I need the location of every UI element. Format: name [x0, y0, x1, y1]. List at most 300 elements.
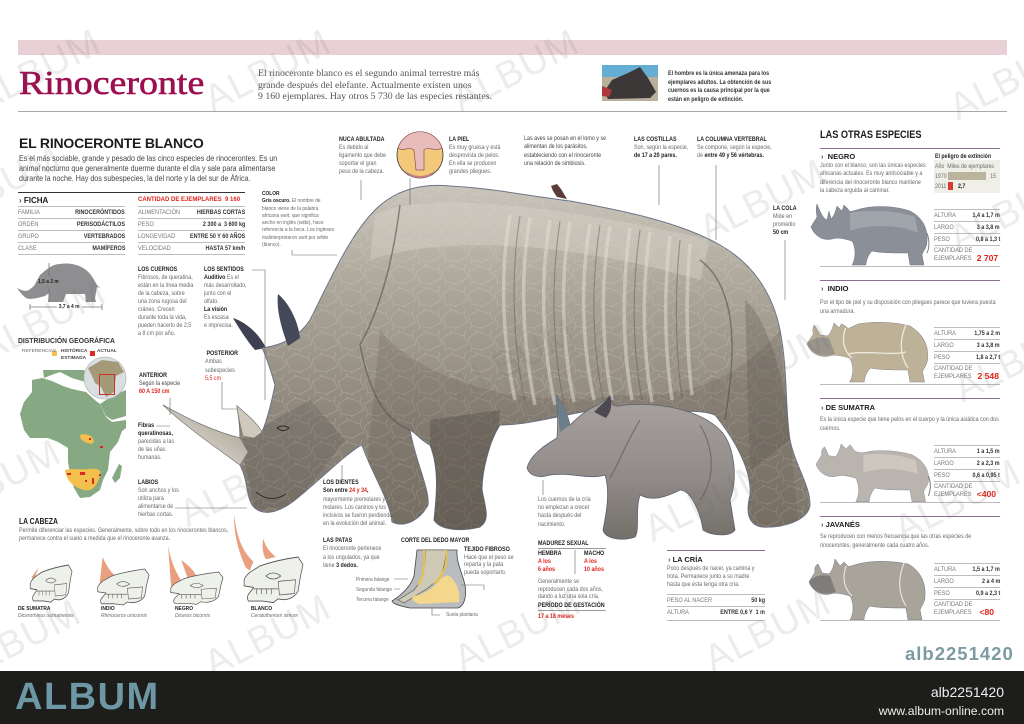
intro text: 9 160 ejemplares. Hay otros 5 730 de las especies restantes.	[258, 91, 492, 102]
indio text: una armadura.	[820, 308, 855, 315]
callout: calf horns: no empiezan a crecer	[538, 504, 589, 511]
callout: posterior horn: subespecies	[205, 367, 235, 374]
illustration: sumatran rhino	[816, 444, 930, 502]
photo caption: ejemplares adultos. La obtención de sus	[668, 78, 771, 86]
watermarks: ALBUM	[173, 436, 313, 536]
callout: senses: olfato.	[204, 298, 219, 305]
indio table: ALTURA	[934, 330, 956, 337]
callout: keratin fibres: queratinosas,	[138, 430, 173, 437]
indio table: LARGO	[934, 342, 954, 349]
panel: sumatra	[820, 398, 1000, 503]
callout: neck	[339, 136, 386, 175]
reproduction text: dando a luz una sola cría.	[538, 593, 599, 600]
sumatra table: <400	[977, 489, 996, 499]
callout: tail: 50 cm	[773, 229, 788, 236]
callout: posterior horn: POSTERIOR	[206, 350, 238, 357]
negro heading: › NEGRO	[821, 152, 855, 161]
header rule	[18, 111, 1007, 112]
sumatra table: ALTURA	[934, 448, 956, 455]
callout: color: malinterpretaron weit por white	[262, 235, 328, 241]
callout: neck: Es debido al	[339, 144, 368, 151]
callout: horns: LOS CUERNOS	[138, 266, 177, 273]
skull: Indio	[98, 557, 149, 605]
callout: fibrous tissue	[464, 546, 514, 576]
callout: teeth: LOS DIENTES	[323, 479, 359, 486]
callout: skin: grandes pliegues.	[449, 168, 491, 175]
second horn	[237, 406, 262, 438]
gestation: PERÍODO DE GESTACIÓN	[538, 602, 605, 609]
callout: teeth: molares. Los caninos y los	[323, 504, 386, 511]
callout: neck: NUCA ABULTADA	[339, 136, 384, 143]
skull label: Negro: NEGRO	[175, 606, 193, 612]
inset: skin section	[397, 132, 443, 178]
shading	[240, 400, 345, 510]
callout: neck: soportar el gran	[339, 160, 376, 167]
extinction chart	[934, 160, 1000, 193]
callout: horns	[138, 266, 194, 337]
callout: anterior horn: ANTERIOR	[139, 372, 167, 379]
sumatra table: LARGO	[934, 460, 954, 467]
toe labels: Segunda falange	[356, 587, 392, 593]
ficha data table: ENTRE 50 Y 60 AÑOS	[190, 233, 245, 240]
callout: feet: El rinoceronte pertenece	[323, 545, 381, 552]
callout: calf horns: nacimiento.	[538, 521, 565, 528]
callout: color: africana weit, que significa	[262, 213, 319, 219]
callout: ribs: LAS COSTILLAS	[634, 136, 677, 143]
indio table: 1,75 a 2 m	[974, 330, 1000, 337]
heading: other species: LAS OTRAS ESPECIES	[820, 129, 921, 141]
callout: feet: LAS PATAS	[323, 537, 352, 544]
photo caption: cuernos es la causa principal por la que	[668, 87, 770, 94]
watermarks: ALBUM	[198, 21, 338, 121]
callout: tail	[773, 205, 797, 236]
panel: the calf	[667, 550, 765, 621]
callout: fibrous tissue: Hace que el peso se	[464, 554, 514, 561]
skull label: Blanco: Ceratotherium simum	[251, 612, 298, 618]
callout: senses	[204, 266, 247, 329]
ficha data table: ALIMENTACIÓN	[138, 209, 180, 216]
javanes table: CANTIDAD DE	[934, 601, 972, 608]
javanes table: 1,5 a 1,7 m	[973, 566, 1000, 573]
extinction chart labels	[935, 153, 996, 190]
negro table: EJEMPLARES	[934, 255, 971, 262]
female maturity	[538, 550, 562, 573]
callout: senses: La visión	[204, 306, 227, 313]
calf text: hasta que ésta tenga otra cría.	[667, 581, 740, 588]
reproduction text	[538, 578, 603, 600]
skull: Sumatra	[30, 565, 72, 602]
calf text	[667, 565, 754, 588]
indio heading: › INDIO	[821, 284, 849, 293]
photo: hunted rhino	[602, 65, 658, 101]
calf text: Poco después de nacer, ya camina y	[667, 565, 754, 572]
skull label: Indio: INDIO	[101, 606, 115, 612]
front horn	[163, 405, 248, 465]
white rhino description: durante la noche. Hay dos subespecies, la del norte y la del sur de África.	[19, 173, 250, 183]
ficha taxonomy table: GRUPO	[18, 233, 39, 240]
inset: toe section	[392, 550, 466, 608]
negro table: CANTIDAD DE	[934, 247, 972, 254]
callout: lips: LABIOS	[138, 479, 158, 486]
ficha taxonomy table: VERTEBRADOS	[83, 233, 125, 240]
intro text: El rinoceronte blanco es el segundo animal terrestre más	[258, 68, 479, 79]
javanes table: EJEMPLARES	[934, 609, 971, 616]
ficha taxonomy table: MAMÍFEROS	[92, 245, 125, 252]
callout: horns: durante toda la vida,	[138, 314, 187, 321]
skull label: Sumatra: DE SUMATRA	[18, 606, 50, 612]
callout: teeth: en la evolución del animal.	[323, 520, 386, 527]
ribs	[504, 215, 692, 405]
indio table: PESO	[934, 354, 950, 361]
panel: ficha	[18, 192, 245, 255]
javanes table: 2 a 4 m	[982, 578, 1000, 585]
callout: color: Gris oscuro. El nombre de	[262, 198, 321, 204]
indio table: 1,8 a 2,7 t	[976, 354, 1000, 361]
ficha heading: › FICHA	[19, 196, 48, 205]
callout: keratin fibres	[138, 422, 174, 461]
javanes text: Se reproducen con menos frecuencia que las otras especies de	[820, 533, 971, 540]
photo caption: El hombre es la única amenaza para los	[668, 70, 769, 77]
ficha data table: 2 300 a 3 600 kg	[203, 221, 245, 228]
callout: spine: de entre 49 y 56 vértebras.	[697, 152, 764, 159]
callout: horns: una zona rugosa del	[138, 298, 187, 305]
negro text: africanas actuales. Es muy antisociable y a	[820, 170, 922, 177]
silhouette measure: length: 3,7 a 4 m	[59, 304, 80, 310]
maturity heading	[538, 540, 606, 549]
heading: distribution: DISTRIBUCIÓN GEOGRÁFICA	[18, 336, 115, 345]
callout: senses: Auditivo Es el	[204, 274, 239, 281]
sumatra table	[934, 445, 1000, 501]
sumatra table: 1 a 1,5 m	[977, 448, 1000, 455]
toe labels	[356, 577, 392, 603]
callout: horns: Fibrosos, de queratina,	[138, 274, 193, 281]
callout: teeth: incisivos se fueron perdiendo	[323, 512, 392, 519]
callout: posterior horn: Ambas	[205, 358, 222, 365]
watermarks: ALBUM	[693, 151, 833, 251]
callout: horns: a 8 cm por año.	[138, 330, 175, 337]
indio table: EJEMPLARES	[934, 373, 971, 380]
callout: skin: En ella se producen	[449, 160, 496, 167]
callout: tail: promedio	[773, 221, 795, 228]
callout: color: COLOR	[262, 191, 279, 197]
callout: anterior horn: 60 A 150 cm	[139, 388, 170, 395]
watermarks: ALBUM	[446, 21, 586, 121]
skull label: Blanco: BLANCO	[251, 606, 272, 612]
white rhino description: animal nocturno que generalmente duerme durante el día y sale para alimentarse	[19, 163, 275, 173]
photo caption	[668, 70, 771, 102]
heading: the head: LA CABEZA	[19, 517, 58, 526]
javanes table: LARGO	[934, 578, 954, 585]
sumatra text: Es la única especie que tiene pelos en el cuerpo y la única asiática con dos	[820, 416, 999, 423]
javanes table: ALTURA	[934, 566, 956, 573]
map legend: REFERENCIAS	[22, 349, 56, 354]
negro table: LARGO	[934, 224, 954, 231]
negro table	[934, 209, 1000, 265]
watermarks: ALBUM	[888, 451, 1024, 551]
callout: posterior horn: 5,5 cm	[205, 375, 221, 382]
icon: ficha rhino silhouette with dimensions	[17, 263, 102, 310]
silhouette measure: length	[57, 303, 81, 311]
negro text: Junto con el blanco, son las únicas especies	[820, 162, 926, 169]
callout: birds: una relación de simbiosis.	[524, 160, 586, 167]
map legend	[22, 348, 117, 361]
illustration: bird on back	[551, 184, 567, 199]
callout: skin	[449, 136, 500, 175]
callout: posterior horn	[205, 350, 238, 382]
skull: Blanco	[234, 514, 303, 603]
callout: senses: e imprecisa.	[204, 322, 233, 329]
skull label: Negro: Diceros bicornis	[175, 612, 210, 618]
callout: feet	[323, 537, 382, 569]
head description	[19, 527, 228, 542]
illustration: javan rhino	[809, 559, 925, 620]
javanes text	[820, 532, 971, 550]
head description: permanece contra el suelo a medida que el rinoceronte avanza.	[19, 535, 170, 542]
negro text: diferencia del rinoceronte blanco mantiene	[820, 179, 921, 186]
reproduction text: Generalmente se	[538, 578, 579, 585]
bottom bar	[0, 671, 1024, 724]
map legend: ACTUAL	[97, 349, 117, 354]
white rhino description: Es el más sociable, grande y pesado de las cinco especies de rinocerontes. Es un	[19, 153, 277, 163]
panel: javanes	[820, 516, 1000, 621]
sumatra table: CANTIDAD DE	[934, 483, 972, 490]
ficha data table	[138, 206, 245, 255]
negro text: la cabeza erguida al caminar.	[820, 187, 890, 194]
extinction chart labels: 15	[990, 173, 996, 180]
callout: lips: alimentarse de	[138, 503, 173, 510]
skull label: Indio: Rhinoceros unicornis	[101, 612, 147, 618]
extinction chart labels: 2,7	[958, 183, 965, 190]
heading: toe section: CORTE DEL DEDO MAYOR	[401, 537, 469, 544]
negro table: PESO	[934, 236, 950, 243]
javanes text: rinocerontes, generalmente cada cuatro años.	[820, 542, 929, 549]
gestation value: 17 a 18 meses	[538, 613, 574, 620]
map legend: ESTIMADA	[61, 356, 86, 361]
callout: lips: Son anchos y los	[138, 487, 179, 494]
callout: color: (blanco).	[262, 242, 281, 248]
female maturity: 6 años	[538, 566, 555, 573]
title: Rinoceronte	[19, 65, 204, 102]
male maturity: 10 años	[584, 566, 604, 573]
negro table: 1,4 a 1,7 m	[973, 212, 1000, 219]
calf heading: › LA CRÍA	[668, 555, 703, 564]
callout: senses: Es escasa	[204, 314, 229, 321]
map legend: HISTÓRICA	[61, 349, 87, 354]
indio text: Por el tipo de piel y su disposición con pliegues parece que tuviera puesta	[820, 299, 996, 306]
map: geographic distribution of Africa	[20, 357, 126, 498]
callout: spine: Se compone, según la especie,	[697, 144, 772, 151]
callout: spine	[697, 136, 772, 159]
callout: birds	[524, 135, 606, 167]
callout: neck: peso de la cabeza.	[339, 168, 384, 175]
callout: horns: están en la línea media	[138, 282, 193, 289]
footer id: alb2251420	[931, 684, 1004, 700]
callout: teeth: mayormente premolares y	[323, 496, 385, 503]
extinction chart labels: 1970	[935, 173, 947, 180]
callout: ribs: Son, según la especie,	[634, 144, 688, 151]
callout: calf horns: hasta después del	[538, 512, 581, 519]
callout: color	[262, 191, 334, 248]
illustration: black rhino	[811, 204, 929, 265]
intro text	[258, 68, 492, 102]
sumatra text: cuernos.	[820, 425, 841, 432]
ficha data table: PESO	[138, 221, 154, 228]
callout: tail: LA COLA	[773, 205, 797, 212]
extinction chart labels: El peligro de extinción	[935, 153, 991, 160]
skull label: Blanco	[251, 606, 298, 618]
callout: fibrous tissue: pueda soportarlo.	[464, 569, 506, 576]
callout: lips	[138, 479, 179, 518]
photo caption: están en peligro de extinción.	[668, 96, 743, 102]
calf table	[667, 594, 765, 616]
javanes table: PESO	[934, 590, 950, 597]
callout: teeth: Son entre 24 y 34,	[323, 487, 369, 494]
head description: Permite diferenciar las especies. Generalmente, sobre todo en los rinocerontes blancos,	[19, 527, 228, 534]
callout: calf horns	[538, 496, 591, 528]
ficha data table: LONGEVIDAD	[138, 233, 175, 240]
footer id: www.album-online.com	[879, 704, 1004, 718]
ficha taxonomy table: PERISODÁCTILOS	[77, 221, 125, 228]
callout: horns: de la cabeza, sobre	[138, 290, 185, 297]
ficha data table: VELOCIDAD	[138, 245, 171, 252]
sumatra table: EJEMPLARES	[934, 491, 971, 498]
callout: horns: pueden hacerlo de 2,5	[138, 322, 191, 329]
skull label: Sumatra: Dicerorhinus sumatrensis	[18, 612, 74, 618]
extinction chart labels: 2011	[935, 183, 946, 190]
callout: keratin fibres: de las uñas	[138, 446, 165, 453]
calf table: ENTRE 0,6 Y 1 m	[720, 609, 765, 616]
callout: lips: hierbas cortas.	[138, 511, 173, 518]
callout: skin: desprovista de pelos.	[449, 152, 500, 159]
eye and mouth	[256, 426, 289, 499]
javanes table	[934, 563, 1000, 619]
sumatra table: 2 a 2,3 m	[977, 460, 1000, 467]
panel: indio	[820, 280, 1000, 385]
near ear	[278, 294, 300, 346]
toe labels: Tercera falange	[356, 597, 389, 603]
watermarks: ALBUM	[698, 316, 838, 416]
indio table: 2 548	[977, 371, 999, 381]
callout: keratin fibres: humanas.	[138, 454, 162, 461]
skull: Negro	[168, 545, 223, 604]
title band	[18, 40, 1007, 55]
toe label: sole: Suela plantaria	[446, 612, 478, 618]
male maturity: A los	[584, 558, 597, 565]
callout: keratin fibres: parecidas a las	[138, 438, 174, 445]
sumatra text	[820, 415, 999, 433]
negro table: 0,8 a 1,3 t	[976, 236, 1000, 243]
javanes table: <80	[979, 607, 994, 617]
heading: white rhino: EL RINOCERONTE BLANCO	[19, 135, 204, 151]
callout: neck: ligamento que debe	[339, 152, 386, 159]
extinction chart labels: Año Miles de ejemplares	[935, 163, 994, 170]
panel: sexual maturity	[538, 540, 606, 620]
watermarks: ALBUM	[443, 311, 583, 411]
male maturity	[584, 550, 604, 573]
callout: tail: Mide en	[773, 213, 792, 220]
callout: birds: estableciendo con el rinoceronte	[524, 152, 601, 159]
callout: senses: junto con el	[204, 290, 231, 297]
toe labels: Primera falange	[356, 577, 390, 583]
watermarks: ALBUM	[638, 451, 778, 551]
ficha data table: HASTA 57 km/h	[205, 245, 245, 252]
callout: feet: a los ungulados, ya que	[323, 554, 380, 561]
javanes table: 0,9 a 2,3 t	[976, 590, 1000, 597]
ficha taxonomy table: CLASE	[18, 245, 37, 252]
negro table: 3 a 3,8 m	[977, 224, 1000, 231]
ficha taxonomy table	[18, 206, 126, 255]
female maturity: HEMBRA	[538, 550, 561, 557]
callout: fibrous tissue: reparta y la pata	[464, 561, 503, 568]
far ear tuft	[233, 318, 266, 350]
negro table: ALTURA	[934, 212, 956, 219]
callout: anterior horn: Según la especie	[139, 380, 180, 387]
callout: color: referencia a la boca. Los ingleses	[262, 227, 334, 233]
callout: feet: tiene 3 dedos.	[323, 562, 358, 569]
male maturity: MACHO	[584, 550, 604, 557]
callout: skin: Es muy gruesa y está	[449, 144, 500, 151]
skull label: Sumatra	[18, 606, 74, 618]
skull label: Negro	[175, 606, 210, 618]
callout: anterior horn	[139, 372, 180, 395]
calf table: ALTURA	[667, 609, 689, 616]
callout: senses: LOS SENTIDOS	[204, 266, 244, 273]
negro table: 2 707	[977, 253, 998, 263]
callout: ribs	[634, 136, 688, 159]
calf text: trota. Permanece junto a su madre	[667, 573, 749, 580]
callout: teeth	[323, 479, 392, 527]
stock id watermark: alb2251420	[905, 643, 1014, 664]
javanes heading: › JAVANÉS	[821, 520, 860, 529]
illustration: indian rhino	[807, 322, 928, 382]
callout: birds: Las aves se posan en el lomo y se	[524, 135, 606, 142]
calf table: 50 kg	[751, 597, 765, 604]
negro text	[820, 162, 926, 194]
callout: fibrous tissue: TEJIDO FIBROSO	[464, 546, 510, 553]
leader lines	[156, 165, 785, 615]
white rhino description	[19, 153, 277, 183]
ficha taxonomy table: ORDEN	[18, 221, 38, 228]
sumatra heading: › DE SUMATRA	[821, 403, 875, 412]
callout: calf horns: Los cuernos de la cría	[538, 496, 591, 503]
sumatra table: PESO	[934, 472, 950, 479]
indio table: CANTIDAD DE	[934, 365, 972, 372]
callout: color: ancho en inglés (wide), hace	[262, 220, 324, 226]
callout: color: blanco viene de la palabra	[262, 206, 318, 212]
ficha data table: HIERBAS CORTAS	[197, 209, 245, 216]
callout: skin: LA PIEL	[449, 136, 469, 143]
callout: senses: más desarrollado,	[204, 282, 247, 289]
silhouette measure: height: 1,5 a 2 m	[38, 279, 59, 285]
ficha taxonomy table: FAMILIA	[18, 209, 40, 216]
indio text	[820, 298, 996, 316]
footer logo: ALBUM	[15, 676, 160, 718]
callout: horns: cráneo. Crecen	[138, 306, 175, 313]
skull label: Indio	[101, 606, 147, 618]
callout: birds: alimentan de los parásitos,	[524, 143, 588, 150]
indio table: 3 a 3,8 m	[977, 342, 1000, 349]
indio table	[934, 327, 1000, 383]
callout: lips: utiliza para	[138, 495, 164, 502]
map legend swatches	[52, 351, 95, 356]
ficha taxonomy table: RINOCERÓNTIDOS	[75, 209, 125, 216]
callout: ribs: de 17 a 20 pares.	[634, 152, 677, 159]
callout: spine: LA COLUMNA VERTEBRAL	[697, 136, 767, 143]
intro text: grande después del elefante. Actualmente existen unos	[258, 80, 472, 90]
ficha number of specimens: CANTIDAD DE EJEMPLARES 9 160	[138, 196, 240, 203]
illustration: white rhinoceros adult	[160, 180, 820, 540]
calf table: PESO AL NACER	[667, 597, 712, 604]
